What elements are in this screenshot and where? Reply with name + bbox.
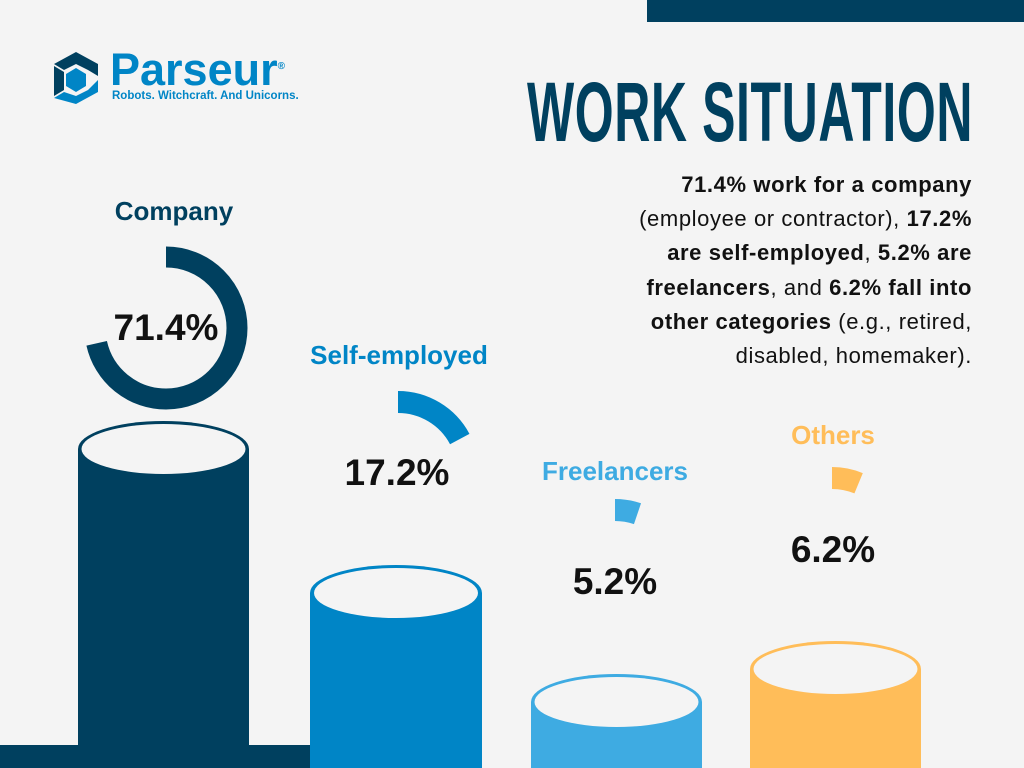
description text: (employee or contractor), 17.2% xyxy=(639,206,972,231)
logo: Robots. Witchcraft. And Unicorns. xyxy=(112,90,299,102)
label: others: Others xyxy=(791,420,875,450)
logo xyxy=(54,44,299,104)
value: self-employed: 17.2% xyxy=(345,452,449,493)
donut: others xyxy=(762,478,902,618)
description text xyxy=(639,172,972,368)
cylinder: others xyxy=(750,641,921,768)
donut: company xyxy=(95,257,237,399)
donut: self-employed xyxy=(328,402,468,542)
label: freelancers: Freelancers xyxy=(542,456,688,486)
description text: are self-employed, 5.2% are xyxy=(667,240,972,265)
icon: parseur cube xyxy=(54,52,98,104)
logo text: Parseur® xyxy=(110,44,285,95)
cylinder: self-employed xyxy=(310,565,482,768)
label: self-employed: Self-employed xyxy=(310,340,488,370)
label: company: Company xyxy=(115,196,233,226)
description text: disabled, homemaker). xyxy=(736,343,972,368)
description text: 71.4% work for a company xyxy=(681,172,972,197)
description text: freelancers, and 6.2% fall into xyxy=(646,275,972,300)
donut: freelancers xyxy=(545,510,685,650)
cylinder: company xyxy=(78,421,249,768)
top right bar xyxy=(647,0,1024,22)
description text: other categories (e.g., retired, xyxy=(651,309,972,334)
bottom left bar xyxy=(0,745,320,768)
value: freelancers: 5.2% xyxy=(573,561,657,602)
value: company: 71.4% xyxy=(114,307,218,348)
title: WORK SITUATION xyxy=(527,65,973,159)
value: others: 6.2% xyxy=(791,529,875,570)
cylinder: freelancers xyxy=(531,674,702,768)
